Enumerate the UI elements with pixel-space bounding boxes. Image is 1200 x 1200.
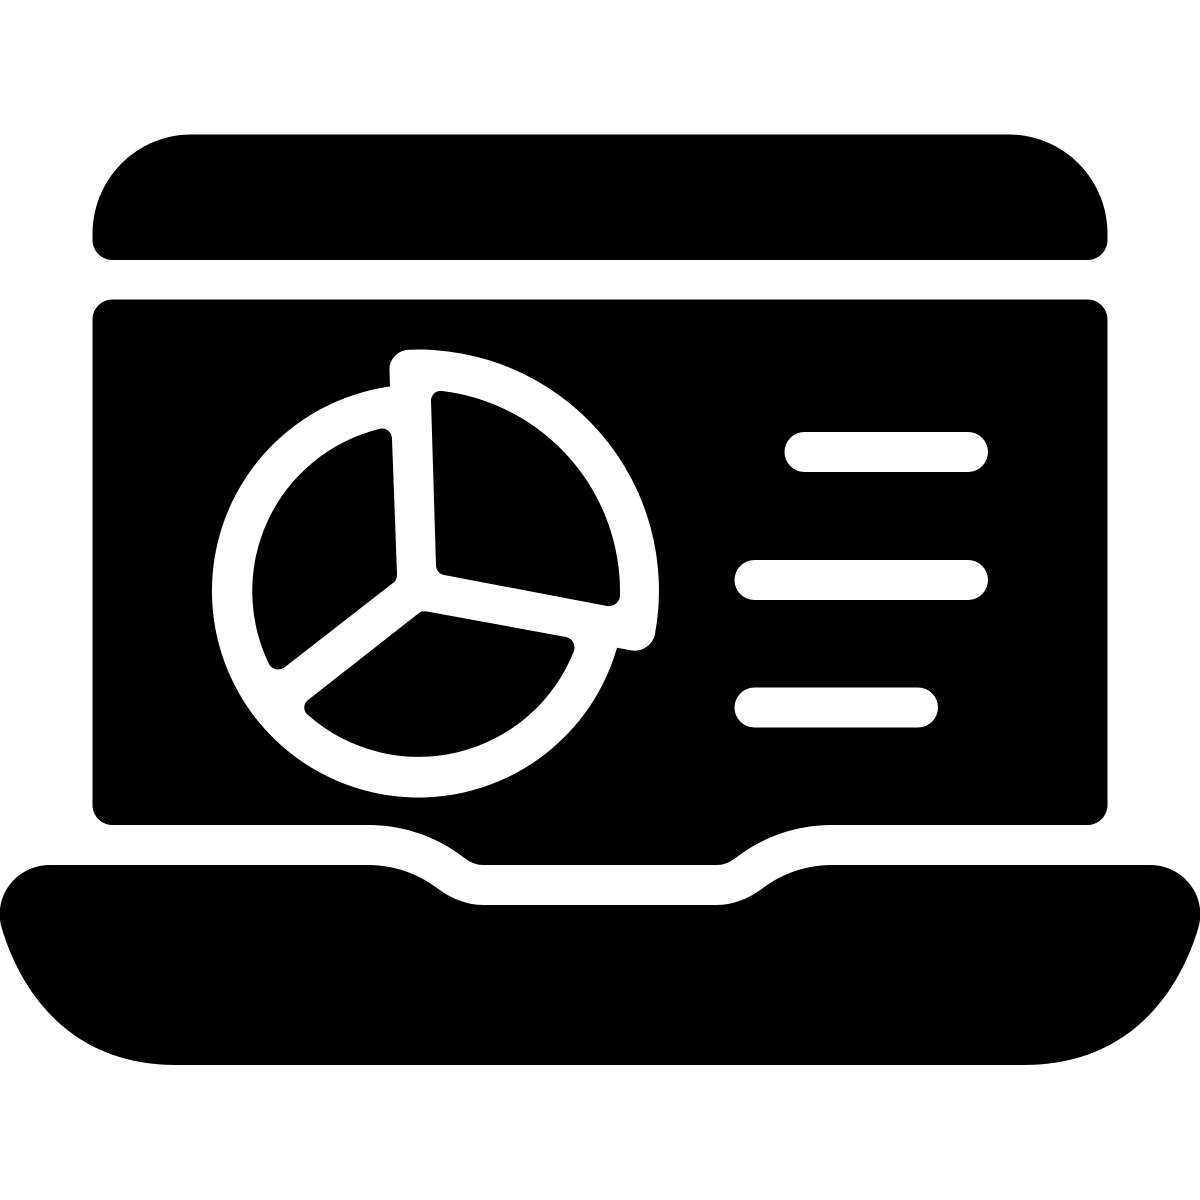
pie slice: bottom [304,611,575,757]
pie slice: upper right [431,391,620,606]
legend line 3 [734,688,938,728]
laptop top bezel [92,134,1108,260]
pie chart [212,350,659,798]
laptop screen [92,300,1108,865]
pie slice: left [252,429,397,669]
legend line 1 [784,432,988,472]
legend lines [734,432,988,728]
laptop base [0,865,1200,1065]
pie chart outer ring [212,350,659,798]
legend line 2 [734,560,988,600]
